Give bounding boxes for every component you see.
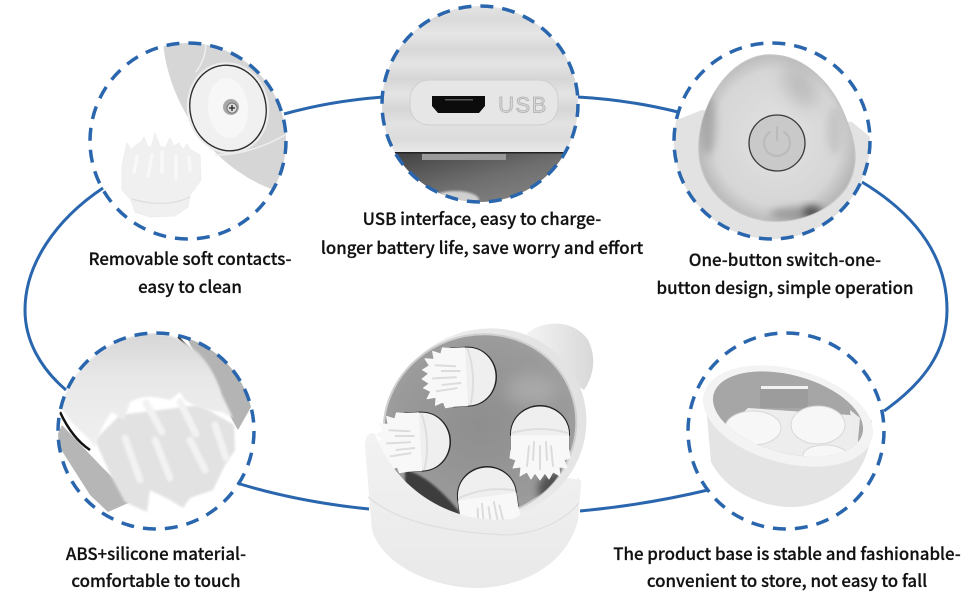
caption: ABS+silicone material: ABS+silicone material- <box>66 540 246 565</box>
caption: product base: The product base is stable and fashionable- <box>613 540 961 565</box>
icon: device body with contact socket <box>164 43 286 189</box>
dashed frame <box>382 6 578 202</box>
caption: USB interface: longer battery life, save worry and effort <box>321 234 643 259</box>
panel: product base photo <box>688 333 884 529</box>
caption: product base: convenient to store, not easy to fall <box>647 567 927 592</box>
dashed frame <box>90 43 286 239</box>
base back <box>366 445 581 588</box>
caption: one-button switch: button design, simple operation <box>656 274 914 299</box>
handle <box>526 324 593 390</box>
caption: removable soft contacts: easy to clean <box>138 273 242 298</box>
connector lines <box>25 97 947 511</box>
dashed frame <box>674 43 870 239</box>
base front <box>365 433 581 588</box>
panel: removable soft contacts photo <box>90 35 295 239</box>
caption: ABS+silicone material: comfortable to touch <box>71 567 241 592</box>
USB plate <box>410 80 558 125</box>
caption: USB interface: USB interface, easy to charge- <box>363 205 601 230</box>
disc <box>358 307 602 545</box>
dashed frame <box>688 333 884 529</box>
icon: power button <box>749 115 805 171</box>
silicone inner fingers <box>95 405 235 512</box>
icon: silicone head <box>122 133 201 217</box>
dashed frame <box>58 333 254 529</box>
icon: silver egg <box>699 55 855 221</box>
caption: removable soft contacts: Removable soft contacts- <box>88 245 292 270</box>
silicone cap <box>60 333 233 447</box>
USB label: USB <box>498 92 548 118</box>
panel: USB port photo <box>380 4 580 209</box>
contact heads <box>374 345 570 545</box>
icon: micro USB port <box>432 96 485 113</box>
panel: power button photo <box>670 43 880 245</box>
caption: one-button switch: One-button switch-one- <box>689 246 881 271</box>
panel: main product photo <box>365 324 594 588</box>
device rim <box>361 301 613 547</box>
panel: silicone material photo <box>55 333 255 529</box>
icon: empty base <box>703 366 873 507</box>
